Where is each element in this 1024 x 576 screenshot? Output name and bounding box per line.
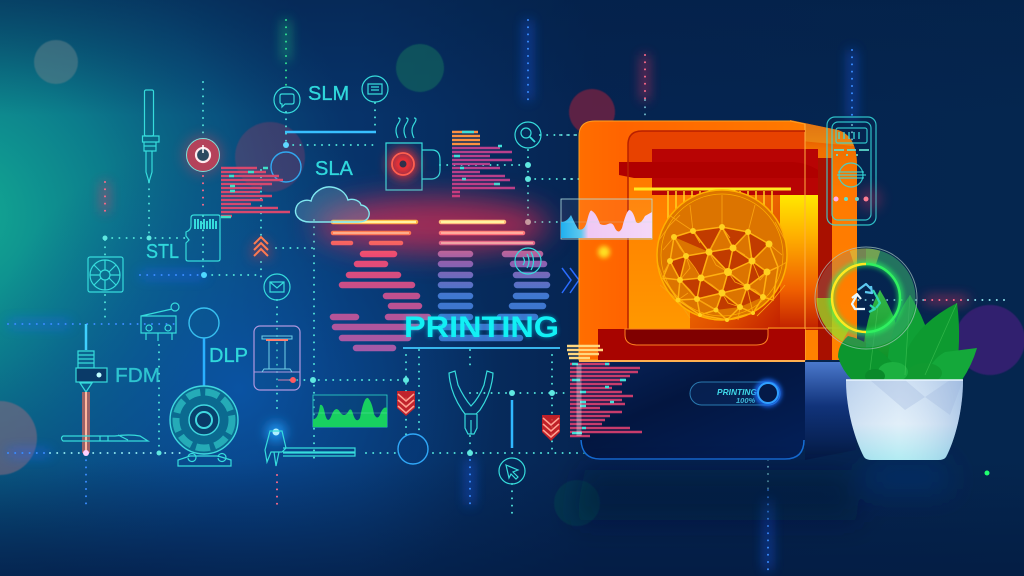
icon: cloud [296,187,369,222]
icon: chevrons right [562,268,579,293]
glowing line under SLM [285,128,376,136]
heading: PRINTING: PRINTING [404,311,559,344]
icon: recycle symbol [852,284,880,312]
status button: 100% [736,396,756,405]
dark red base [598,329,805,360]
icon: SLA circle [271,152,301,182]
icon: extruder FDM [76,324,107,456]
3 shape bars [333,222,428,348]
label: SLM: SLM [308,83,349,105]
icon: mini printer [254,326,300,390]
icon: coffee mug [386,118,440,190]
icon: DLP circle and line [189,308,219,387]
icon: sound circle [515,248,541,274]
status button: PRINTING [717,387,757,397]
code block left [221,168,290,217]
icon: scalpel [62,435,148,441]
heading: 3D bars [314,197,550,348]
icon: power button [183,135,223,175]
icon: filament spool [170,386,238,466]
printer front orange body [579,121,805,360]
code block centre [452,132,515,196]
panel: floor reflection [575,464,950,520]
chevrons down red left [397,391,415,416]
printed lattice sphere [657,190,787,322]
area chart in printer [561,199,652,239]
flower pot [846,380,963,460]
icon: micro switch [141,303,179,341]
red glow at multimeter [858,187,882,211]
icon: cooling fan [88,257,123,292]
label: SLA: SLA [315,158,353,180]
icon: document circle [362,76,388,102]
chamber window outline [628,131,805,330]
area chart green [313,395,387,427]
3D printer [579,120,857,460]
printer lower body [579,362,805,460]
chamber back [652,133,805,330]
icon: tall nozzle [142,90,159,182]
yellow platform [634,186,791,192]
code block bottom [567,346,642,436]
support struts [668,191,772,238]
heading: PRINTING: PRINTING [404,311,559,344]
D shape bars [441,222,547,338]
icon: memory card [186,215,220,261]
glow spot [598,246,610,258]
chevrons up pink [252,237,270,262]
icon: cursor circle [499,458,525,484]
icon: magnifier circle [515,122,541,148]
label: FDM: FDM [115,365,160,387]
icon: envelope circle [264,274,290,300]
status button [690,382,780,405]
icon: caliper [265,423,355,466]
icon: recycle ring [815,247,917,349]
glow dot green [984,470,990,476]
label: STL: STL [146,241,179,263]
printer lower side [805,362,856,460]
yellow back panel [780,195,818,330]
printer side shell [790,120,857,360]
plant leaves [838,290,977,383]
icon: outline circle [398,434,428,464]
label: DLP: DLP [209,345,248,367]
glow bar [508,400,516,448]
icon: pliers [449,371,493,434]
icon: multimeter [827,117,876,225]
icon: chat bubble [274,87,300,113]
chevrons down red right [542,415,560,441]
